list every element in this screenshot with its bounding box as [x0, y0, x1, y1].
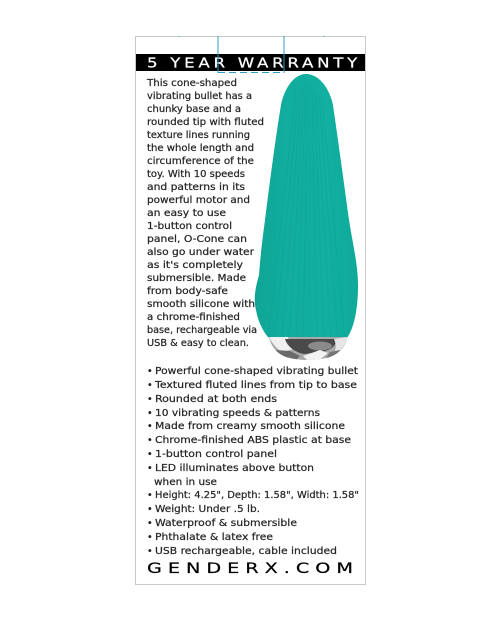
feature list: • [147, 504, 153, 515]
description text [146, 78, 264, 349]
description text: vibrating bullet has a [147, 91, 252, 102]
feature list: Powerful cone-shaped vibrating bullet [155, 366, 358, 377]
description text: USB & easy to clean. [147, 338, 249, 349]
description text: rounded tip with fluted [147, 117, 264, 128]
description text: as it's completely [147, 260, 244, 271]
feature list: • [147, 380, 153, 391]
feature list: 1-button control panel [155, 449, 277, 460]
feature list: • [147, 532, 153, 543]
description text: chunky base and a [147, 104, 241, 115]
feature list: Rounded at both ends [155, 394, 277, 405]
description text: powerful motor and [147, 195, 250, 206]
infographic canvas [135, 36, 366, 585]
description text: a chrome-finished [147, 312, 240, 323]
description text: panel, O-Cone can [147, 234, 247, 245]
description text: also go under water [147, 247, 254, 258]
feature list: USB rechargeable, cable included [155, 546, 337, 557]
feature list: Height: 4.25", Depth: 1.58", Width: 1.58" [155, 490, 359, 501]
feature list: 10 vibrating speeds & patterns [155, 408, 320, 419]
description text: an easy to use [147, 208, 226, 219]
description text: submersible. Made [147, 273, 246, 284]
description text: base, rechargeable via [147, 325, 257, 336]
feature list: Waterproof & submersible [155, 518, 297, 529]
feature list: Textured fluted lines from tip to base [154, 380, 357, 391]
chrome base [269, 337, 347, 360]
feature list: • [147, 490, 153, 501]
description text: This cone-shaped [146, 78, 237, 89]
description text: circumference of the [147, 156, 254, 167]
feature list: • [147, 366, 153, 377]
description text: and patterns in its [147, 182, 245, 193]
icon: cone-shaped vibrating bullet [255, 74, 358, 364]
feature list: • [147, 546, 153, 557]
feature list: • [147, 394, 153, 405]
website footer: GENDERX.COM [147, 561, 359, 577]
description text: toy. With 10 speeds [147, 169, 245, 180]
feature list: LED illuminates above button [155, 463, 314, 474]
feature list: • [147, 421, 153, 432]
feature list: • [147, 463, 153, 474]
panel: card [136, 36, 366, 584]
warranty banner [136, 54, 365, 72]
feature list: Weight: Under .5 lb. [155, 504, 260, 515]
description text: smooth silicone with [147, 299, 255, 310]
description text: from body-safe [147, 286, 228, 297]
feature list: Chrome-finished ABS plastic at base [155, 435, 351, 446]
description text: 1-button control [147, 221, 232, 232]
description text: texture lines running [147, 130, 250, 141]
feature list: Made from creamy smooth silicone [155, 421, 345, 432]
feature list: • [147, 449, 153, 460]
feature list: • [147, 518, 153, 529]
feature list: • [147, 435, 153, 446]
warranty banner: 5 YEAR WARRANTY [147, 56, 361, 72]
feature list: • [147, 408, 153, 419]
feature list: Phthalate & latex free [155, 532, 273, 543]
feature list [147, 366, 359, 557]
feature list: when in use [154, 477, 217, 488]
crop guide frame [179, 36, 324, 73]
description text: the whole length and [147, 143, 254, 154]
